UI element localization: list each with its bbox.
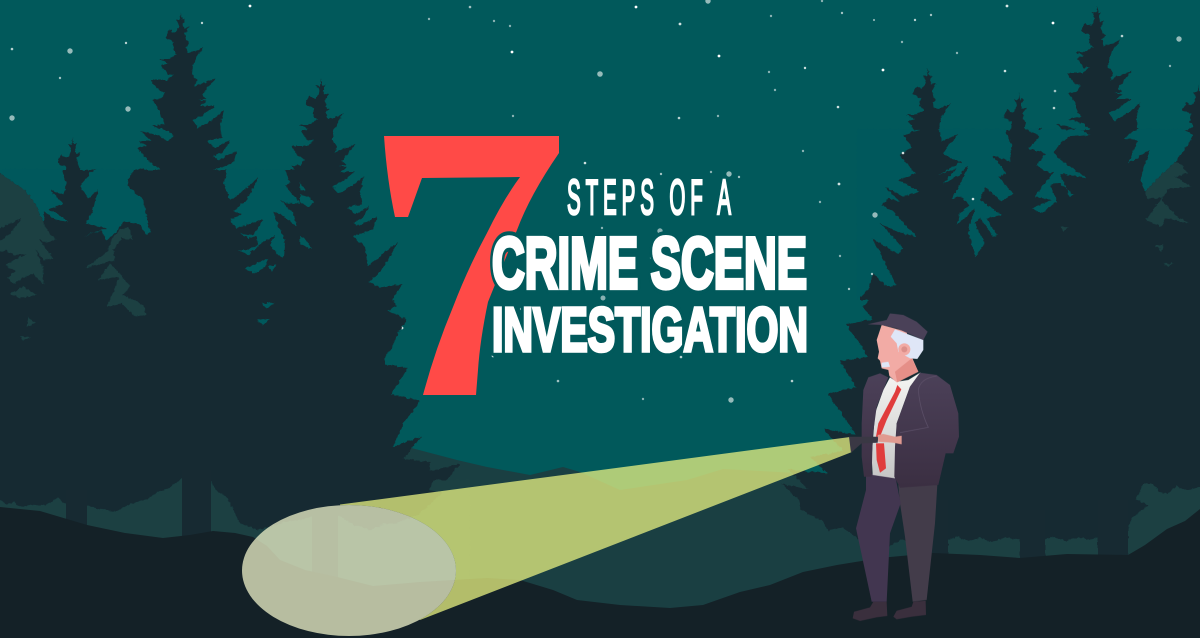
- tree trunks: [66, 470, 1128, 590]
- left pine trees: [0, 13, 467, 618]
- shirt: [872, 372, 921, 478]
- investigator figure: [849, 313, 959, 621]
- flashlight beam: [340, 437, 852, 620]
- foreground ground: [0, 507, 1200, 638]
- shoes: [853, 601, 926, 621]
- flashlight pool of light: [242, 505, 456, 636]
- back leg: [898, 485, 937, 602]
- neck shadow: [895, 358, 918, 382]
- moustache: [882, 362, 890, 367]
- ear: [898, 343, 910, 355]
- necktie: [876, 385, 901, 473]
- white hair: [891, 329, 923, 359]
- title: crime scene: CRIME SCENE: [492, 224, 807, 304]
- flashlight: [849, 437, 878, 453]
- title: investigation: INVESTIGATION: [492, 296, 808, 365]
- gaps between left trees: [0, 163, 300, 341]
- stars over gaps: [839, 152, 974, 290]
- starry sky: [9, 0, 1182, 403]
- hand: [878, 434, 902, 444]
- head: [877, 325, 918, 382]
- right pine trees: [782, 6, 1200, 573]
- title halo: [492, 224, 808, 365]
- jacket: [862, 373, 959, 488]
- undergrowth left: [0, 478, 470, 600]
- sleeve seam: [900, 376, 937, 433]
- undergrowth right: [948, 482, 1200, 570]
- gaps between right trees: [857, 129, 1193, 300]
- title: steps of a: STEPS OF A: [567, 170, 736, 224]
- front leg: [856, 473, 901, 602]
- middle hills: [400, 445, 950, 620]
- numeral 7: [384, 136, 559, 395]
- title halo: INVESTIGATION: [492, 296, 808, 365]
- cap: [867, 313, 928, 340]
- title halo: CRIME SCENE: [492, 224, 807, 304]
